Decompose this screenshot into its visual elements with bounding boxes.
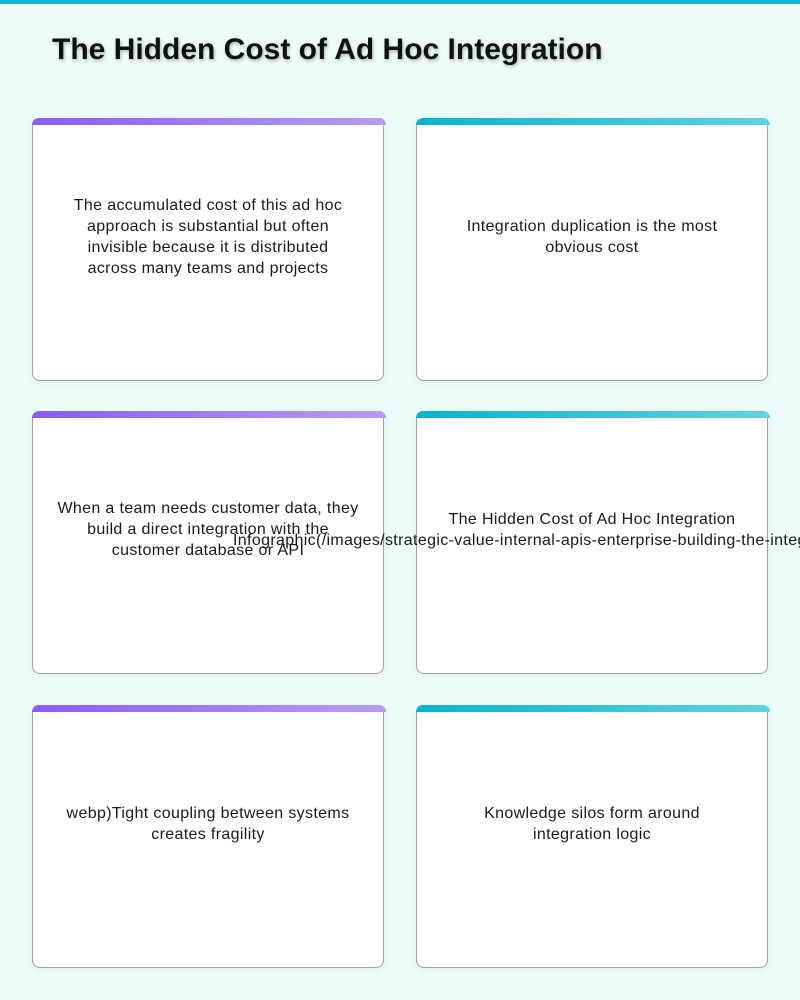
card 3: When a team needs customer data, they bbox=[57, 500, 359, 517]
card 1: invisible because it is distributed bbox=[88, 238, 328, 256]
card 3: customer database or API bbox=[112, 542, 304, 559]
card 3 bbox=[32, 411, 384, 674]
card 6: Knowledge silos form around bbox=[484, 804, 700, 822]
card 5: webp)Tight coupling between systems bbox=[67, 804, 349, 822]
card 4 bbox=[416, 411, 768, 674]
card 2: Integration duplication is the most bbox=[467, 218, 717, 234]
card 5: creates fragility bbox=[151, 826, 265, 842]
card 1: across many teams and projects bbox=[88, 260, 328, 276]
card 1: The accumulated cost of this ad hoc bbox=[74, 196, 342, 214]
card 3: build a direct integration with the bbox=[87, 521, 329, 538]
card 4: The Hidden Cost of Ad Hoc Integration bbox=[449, 510, 735, 528]
card 1: approach is substantial but often bbox=[87, 218, 329, 234]
card 6: integration logic bbox=[533, 826, 651, 842]
card 6 bbox=[416, 705, 768, 968]
title: The Hidden Cost of Ad Hoc Integration bbox=[52, 33, 603, 66]
card 5 bbox=[32, 705, 384, 968]
card 1 bbox=[32, 118, 384, 381]
card 2 bbox=[416, 118, 768, 381]
card 2: obvious cost bbox=[545, 238, 639, 256]
